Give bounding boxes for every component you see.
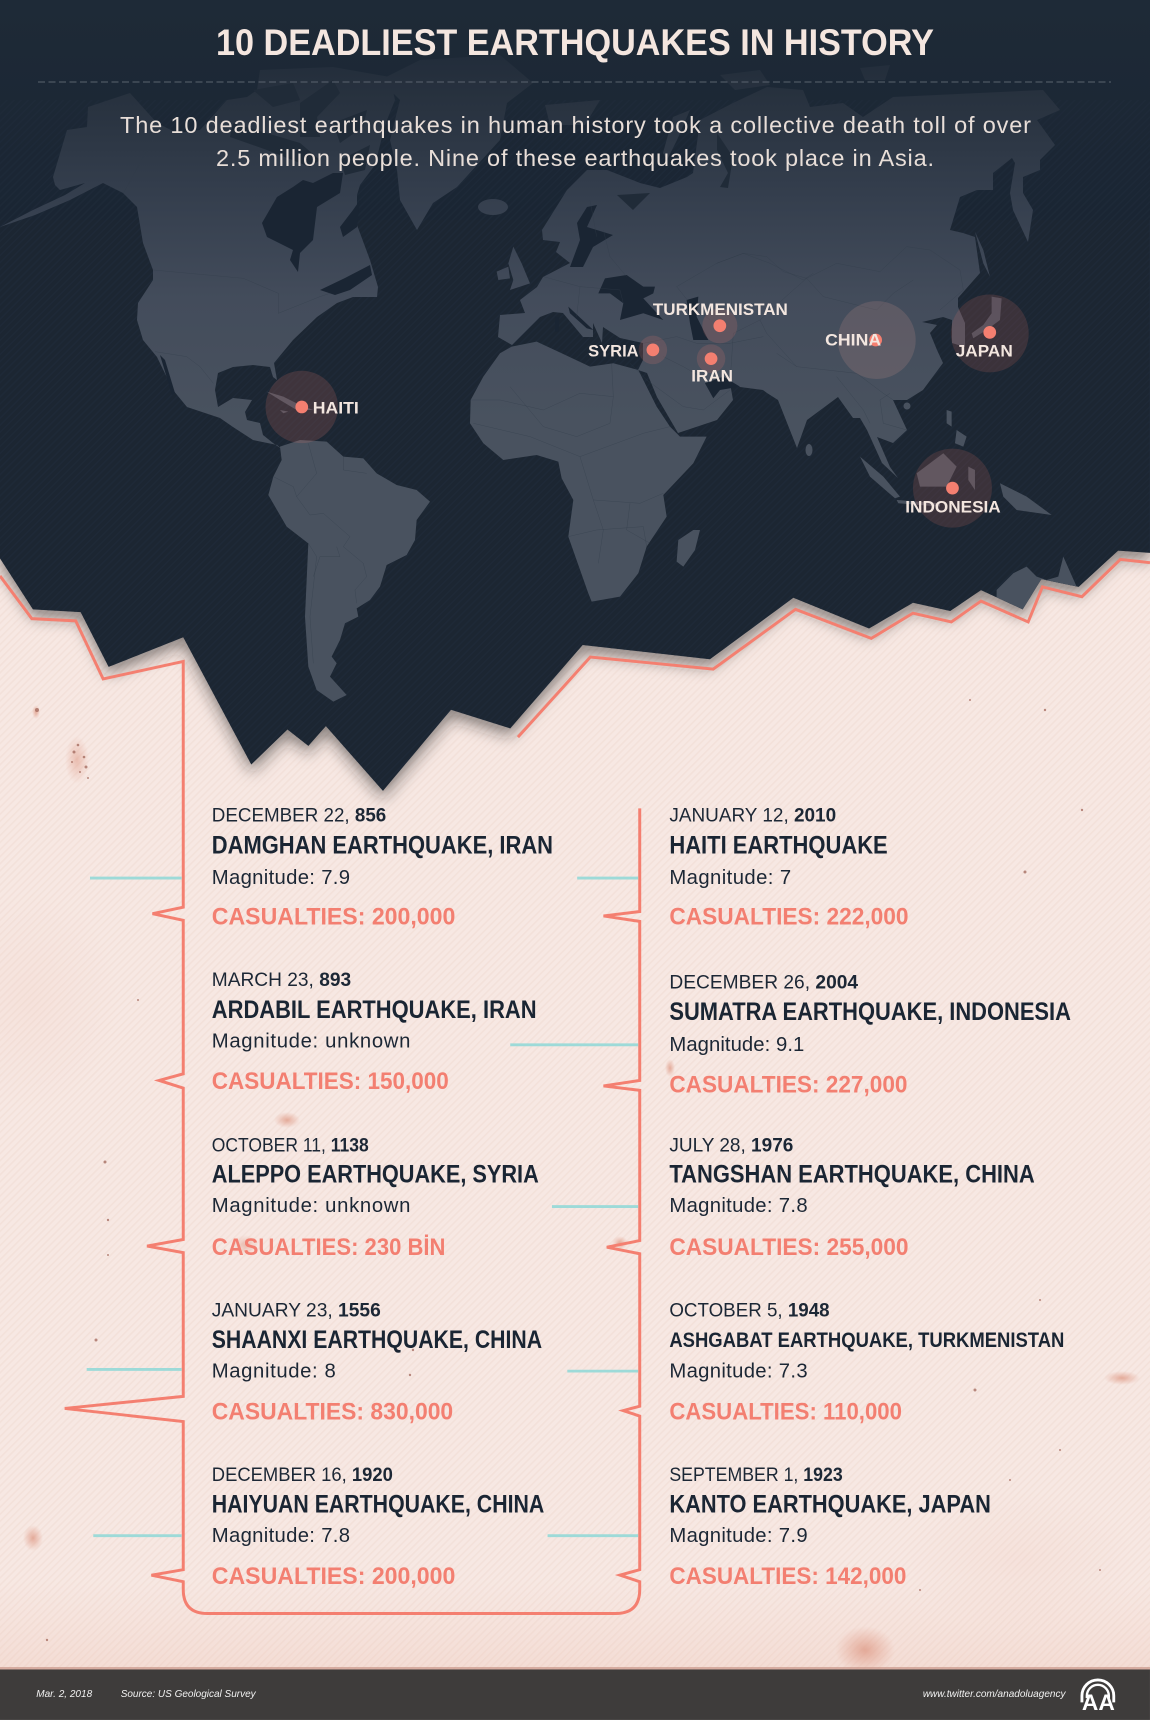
entry: Sumatra: DECEMBER 26, 2004	[669, 972, 858, 993]
map marker: Iran	[691, 344, 733, 386]
entry: Aleppo: OCTOBER 11, 1138	[212, 1136, 369, 1157]
entry: Kanto: KANTO EARTHQUAKE, JAPAN	[669, 1492, 991, 1519]
title: 10 DEADLIEST EARTHQUAKES IN HISTORY	[216, 21, 934, 63]
footer: www.twitter.com/anadoluagency	[923, 1689, 1066, 1700]
map marker: Japan: JAPAN	[956, 341, 1013, 360]
entry: Shaanxi	[212, 1300, 542, 1425]
entry: Shaanxi: JANUARY 23, 1556	[212, 1300, 381, 1321]
entry: Aleppo	[212, 1136, 539, 1261]
map marker: Syria: SYRIA	[588, 341, 639, 360]
map marker: Iran: IRAN	[691, 367, 733, 386]
entry: Tangshan: CASUALTIES: 255,000	[669, 1234, 909, 1261]
title divider	[38, 81, 1111, 83]
map marker: Indonesia: INDONESIA	[905, 497, 1001, 516]
entry: Ashgabat: Magnitude: 7.3	[669, 1361, 808, 1383]
entry: Haiti: Magnitude: 7	[669, 867, 791, 889]
map marker: China	[825, 301, 916, 379]
entry: Tangshan	[669, 1136, 1035, 1261]
map marker: Indonesia	[905, 449, 1001, 528]
entry: Haiyuan	[212, 1465, 544, 1590]
entry: Haiyuan: CASUALTIES: 200,000	[212, 1563, 455, 1590]
entry: Haiyuan: DECEMBER 16, 1920	[212, 1465, 393, 1486]
entry: Ardabil: Magnitude: unknown	[212, 1031, 410, 1053]
entry: Kanto: SEPTEMBER 1, 1923	[669, 1465, 843, 1486]
entry: Sumatra: Magnitude: 9.1	[669, 1034, 804, 1056]
footer: Mar. 2, 2018	[36, 1689, 92, 1700]
entry: Tangshan: JULY 28, 1976	[669, 1136, 793, 1157]
map marker: Turkmenistan	[653, 300, 788, 343]
entry: Damghan: DECEMBER 22, 856	[212, 806, 386, 827]
entry: Haiti: CASUALTIES: 222,000	[669, 904, 909, 931]
entry: Ardabil: CASUALTIES: 150,000	[212, 1068, 449, 1095]
entry: Shaanxi: CASUALTIES: 830,000	[212, 1398, 453, 1425]
entry: Ashgabat	[669, 1300, 1064, 1425]
map marker: Haiti	[266, 371, 359, 443]
map marker: China: CHINA	[825, 331, 881, 350]
footer	[0, 1669, 1150, 1720]
intro text: The 10 deadliest earthquakes in human history took a collective death toll of over	[120, 112, 1031, 138]
entry: Damghan: Magnitude: 7.9	[212, 867, 350, 889]
entry: Tangshan: Magnitude: 7.8	[669, 1195, 808, 1217]
entry: Tangshan: TANGSHAN EARTHQUAKE, CHINA	[669, 1161, 1035, 1188]
entry: Shaanxi: Magnitude: 8	[212, 1361, 336, 1383]
entry: Sumatra: CASUALTIES: 227,000	[669, 1072, 907, 1099]
entry: Haiti: HAITI EARTHQUAKE	[669, 832, 888, 859]
coral bracket: left seismograph line	[0, 576, 640, 1614]
intro text	[120, 112, 1031, 171]
icon: Anadolu Agency logo	[1082, 1680, 1115, 1715]
coral line: right seismograph line	[518, 559, 1150, 737]
map marker: Japan	[951, 295, 1029, 372]
entry: Ashgabat: OCTOBER 5, 1948	[669, 1300, 830, 1321]
map marker: Turkmenistan: TURKMENISTAN	[653, 300, 788, 319]
entry: Kanto: Magnitude: 7.9	[669, 1525, 808, 1547]
map marker: Syria	[588, 336, 667, 364]
entry: Ashgabat: CASUALTIES: 110,000	[669, 1398, 902, 1425]
entry: Haiyuan: Magnitude: 7.8	[212, 1525, 350, 1547]
dark map background with torn edge	[0, 0, 1150, 791]
entry: Ardabil: MARCH 23, 893	[212, 970, 351, 991]
entry: Haiti	[669, 806, 909, 931]
world map	[0, 55, 1146, 791]
teal magnitude ticks	[87, 878, 638, 1536]
entry: Haiti: JANUARY 12, 2010	[669, 806, 836, 827]
entry: Damghan	[212, 806, 553, 931]
entry: Aleppo: CASUALTIES: 230 BİN	[212, 1234, 446, 1261]
intro text: 2.5 million people. Nine of these earthquakes took place in Asia.	[216, 145, 934, 171]
entry: Kanto: CASUALTIES: 142,000	[669, 1563, 906, 1590]
entry: Ardabil	[212, 970, 537, 1095]
entry: Kanto	[669, 1465, 991, 1590]
entry: Sumatra: SUMATRA EARTHQUAKE, INDONESIA	[669, 999, 1071, 1026]
icon: Anadolu Agency logo: AA	[1082, 1690, 1115, 1715]
entry: Ardabil: ARDABIL EARTHQUAKE, IRAN	[212, 997, 537, 1024]
entry: Aleppo: Magnitude: unknown	[212, 1195, 410, 1217]
footer: Source: US Geological Survey	[121, 1689, 256, 1700]
entry: Sumatra	[669, 972, 1071, 1099]
entry: Ashgabat: ASHGABAT EARTHQUAKE, TURKMENISTAN	[669, 1328, 1064, 1352]
entry: Haiyuan: HAIYUAN EARTHQUAKE, CHINA	[212, 1492, 544, 1519]
entry: Damghan: CASUALTIES: 200,000	[212, 904, 455, 931]
map marker: Haiti: HAITI	[313, 399, 359, 418]
entry: Aleppo: ALEPPO EARTHQUAKE, SYRIA	[212, 1161, 539, 1188]
entry: Shaanxi: SHAANXI EARTHQUAKE, CHINA	[212, 1327, 542, 1354]
entry: Damghan: DAMGHAN EARTHQUAKE, IRAN	[212, 832, 553, 859]
